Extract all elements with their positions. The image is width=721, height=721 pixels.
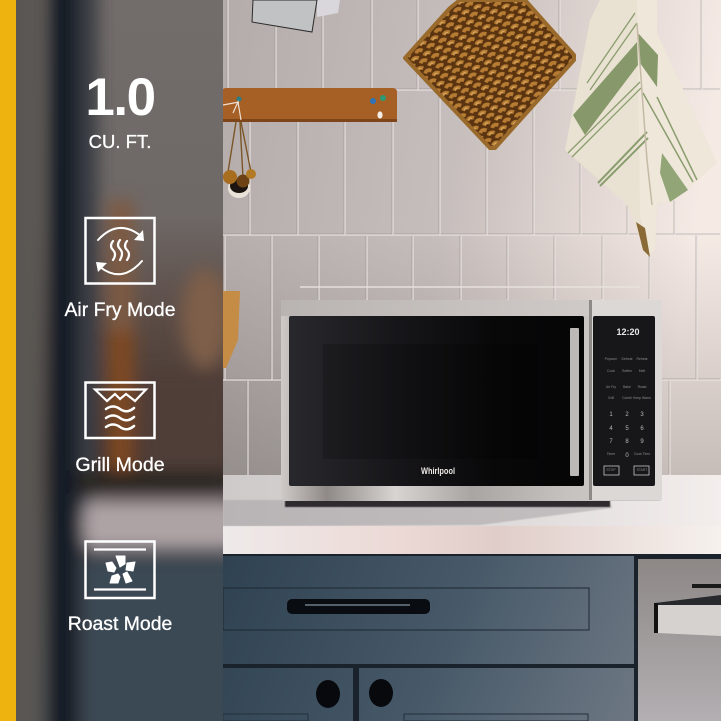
keypad labels: Bake: [623, 385, 631, 389]
measuring spoons: [223, 122, 256, 198]
cork board: [222, 88, 397, 122]
cabinet knobs: [316, 679, 393, 708]
label: roast mode: Roast Mode: [68, 613, 172, 635]
number keys: 2: [625, 412, 629, 418]
capacity heading: 1.0: [85, 68, 155, 127]
control panel: [593, 316, 655, 486]
knitted pot holder: [405, 0, 574, 148]
striped hanging towel: [565, 0, 717, 257]
stop and start buttons: [604, 466, 649, 475]
keypad labels: Air Fry: [606, 385, 616, 389]
number keys: 0: [625, 453, 629, 459]
keypad labels: Soften: [622, 369, 632, 373]
feature: roast mode: [68, 542, 172, 635]
keypad labels: Keep Warm: [633, 396, 651, 400]
number keys: 5: [625, 426, 629, 432]
feature: air fry mode: [65, 218, 175, 321]
keypad labels: Popcorn: [605, 357, 617, 361]
base cabinets: [223, 554, 721, 721]
note paper: [252, 0, 340, 32]
number keys: 9: [640, 439, 644, 445]
door window: [323, 344, 538, 459]
number keys: 3: [640, 412, 644, 418]
keypad labels: [605, 357, 651, 472]
keypad labels: Timer: [607, 452, 616, 456]
label: air fry mode: Air Fry Mode: [65, 299, 175, 321]
keypad labels: START: [637, 468, 647, 472]
number keys: 4: [609, 426, 613, 432]
icon: grill: [86, 382, 154, 438]
keypad labels: Melt: [639, 369, 645, 373]
microwave: [281, 300, 662, 501]
label: grill mode: Grill Mode: [75, 454, 165, 476]
blurred left panel: [16, 0, 223, 721]
number keys: 6: [640, 426, 644, 432]
keypad labels: Reheat: [637, 357, 648, 361]
keypad labels: Cook: [607, 369, 615, 373]
icon: roast fan: [86, 542, 154, 598]
capacity unit: CU. FT.: [89, 131, 151, 152]
reflection above microwave: [300, 286, 640, 288]
keypad labels: Combi: [622, 396, 632, 400]
keypad labels: Cook Time: [634, 452, 650, 456]
dishwasher: [638, 559, 721, 721]
keypad labels: Grill: [608, 396, 614, 400]
door handle: [570, 328, 579, 476]
icon: air fry: [86, 218, 154, 284]
number keys: 7: [609, 439, 613, 445]
keypad labels: Defrost: [622, 357, 633, 361]
feature: grill mode: [75, 382, 165, 476]
wooden spatula: [223, 291, 240, 368]
kitchen background scene: [222, 0, 721, 721]
number keys: 1: [609, 412, 613, 418]
number keys: [609, 412, 644, 459]
whirlpool logo: Whirlpool: [421, 466, 455, 476]
keypad labels: Roast: [638, 385, 646, 389]
microwave door glass: [289, 316, 584, 486]
countertop: [223, 475, 721, 554]
drawer handle: [287, 599, 430, 614]
keypad labels: STOP: [606, 468, 616, 472]
clock display: 12:20: [616, 327, 640, 337]
number keys: 8: [625, 439, 629, 445]
yellow accent bar: [0, 0, 16, 721]
